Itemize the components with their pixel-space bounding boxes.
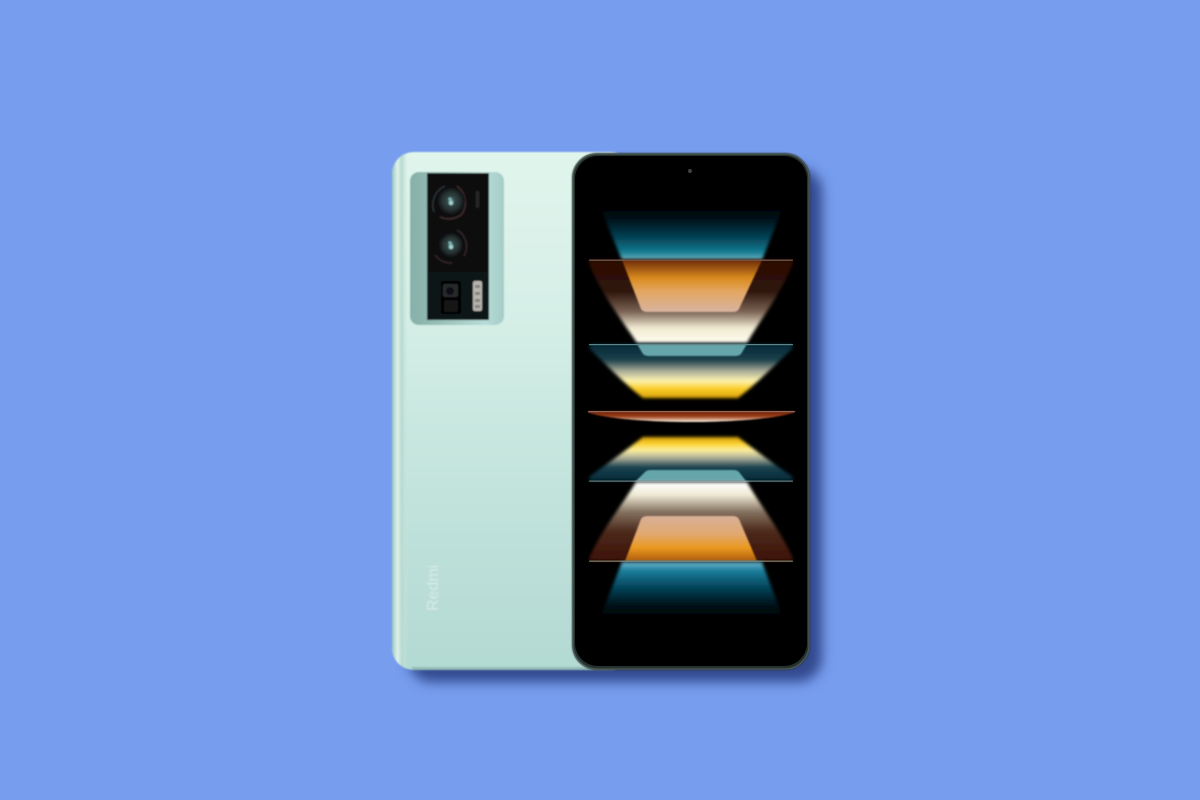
- upper teal inset: [637, 344, 747, 356]
- phone front: [572, 153, 810, 670]
- wallpaper: [588, 207, 795, 618]
- lower glow plate: [589, 482, 793, 561]
- upper teal plate: [589, 344, 793, 398]
- front rim highlight: [573, 154, 809, 669]
- upper glow plate: [589, 260, 793, 343]
- phone back: [392, 152, 632, 670]
- lower camera section: [427, 272, 489, 320]
- back left edge highlight: [392, 152, 408, 670]
- screen: [575, 156, 807, 666]
- lens one: [433, 186, 465, 219]
- central lens edge: [588, 411, 795, 412]
- central lens plate: [588, 411, 795, 422]
- bottom rim: [412, 667, 612, 670]
- lower orange panel: [625, 516, 757, 561]
- lower plate edge: [589, 560, 793, 562]
- front camera: [688, 169, 692, 173]
- lower yellow plate: [589, 437, 793, 481]
- lower yellow edge: [589, 480, 793, 482]
- upper plate edge: [589, 260, 793, 261]
- top teal beam: [600, 207, 783, 260]
- back body: [392, 152, 632, 670]
- upper teal edge: [589, 344, 793, 345]
- camera bump: [410, 172, 504, 325]
- lens two: [435, 230, 467, 263]
- macro lens module: [441, 281, 461, 314]
- phone shadow: [408, 168, 822, 682]
- brand label: Redmi: [425, 565, 442, 611]
- lower teal inset: [636, 470, 746, 481]
- camera panel: [427, 173, 489, 320]
- small sensor: [476, 191, 479, 208]
- upper orange panel: [622, 260, 762, 312]
- front body: [572, 153, 810, 670]
- bottom teal beam: [600, 562, 783, 618]
- flash: [473, 281, 482, 311]
